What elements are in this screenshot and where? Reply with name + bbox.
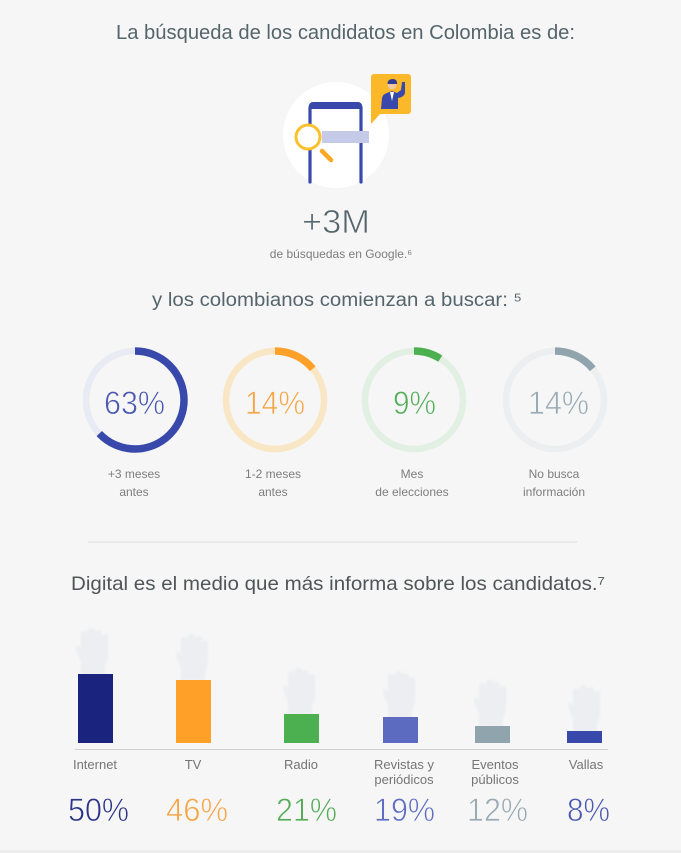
bar: Internet: 50% bbox=[68, 792, 129, 828]
bar: Eventos públicos bbox=[467, 680, 528, 828]
bar: Radio bbox=[276, 668, 337, 828]
donut: 14% no search: información bbox=[523, 485, 585, 499]
donut: 14%: antes bbox=[258, 485, 288, 499]
bar: Revistas y periódicos: periódicos bbox=[374, 772, 434, 787]
donut: 63%: +3 meses bbox=[108, 467, 160, 481]
donut: 14% no search: No busca bbox=[529, 467, 580, 481]
bar: Vallas: 8% bbox=[567, 792, 610, 828]
bar: TV bbox=[166, 634, 228, 828]
donut: 9%: de elecciones bbox=[375, 485, 449, 499]
donut: 9% bbox=[365, 351, 463, 499]
donut: 63% bbox=[86, 351, 184, 499]
title: La búsqueda de los candidatos en Colombia es de: bbox=[116, 22, 575, 44]
donut: 14%: 14% bbox=[245, 385, 305, 421]
bar: Vallas: Vallas bbox=[569, 757, 604, 772]
big number +3M: +3M bbox=[302, 203, 370, 240]
bar: Internet: Internet bbox=[73, 757, 117, 772]
donut: 9%: Mes bbox=[401, 467, 423, 481]
donut: 9%: 9% bbox=[393, 385, 436, 421]
icon: phone search with candidate bubble bbox=[283, 74, 411, 188]
donut: 63%: antes bbox=[119, 485, 149, 499]
bar: Revistas y periódicos: 19% bbox=[374, 792, 435, 828]
bar: Revistas y periódicos bbox=[374, 671, 435, 828]
donut: 63%: 63% bbox=[104, 385, 165, 421]
bar: Internet bbox=[68, 628, 129, 828]
donut: 14% bbox=[226, 351, 324, 499]
bar: Radio: Radio bbox=[284, 757, 318, 772]
caption: searches: de búsquedas en Google.⁶ bbox=[270, 247, 412, 261]
bar chart: media bbox=[68, 628, 610, 828]
bar: TV: TV bbox=[185, 757, 202, 772]
subheading: when they start searching: y los colombianos comienzan a buscar: ⁵ bbox=[152, 290, 522, 311]
bar: Eventos públicos: Eventos bbox=[472, 757, 519, 772]
donut: 14% no search bbox=[506, 351, 604, 499]
bar: Eventos públicos: 12% bbox=[467, 792, 528, 828]
bar: Radio: 21% bbox=[276, 792, 337, 828]
bar: Vallas bbox=[567, 685, 610, 828]
donut: 14% no search: 14% bbox=[528, 385, 589, 421]
bar: TV: 46% bbox=[166, 792, 228, 828]
donut: 14%: 1-2 meses bbox=[245, 467, 301, 481]
bar: Revistas y periódicos: Revistas y bbox=[374, 757, 434, 772]
bar: Eventos públicos: públicos bbox=[471, 772, 519, 787]
heading: digital: Digital es el medio que más informa sobre los candidatos.⁷ bbox=[71, 573, 605, 595]
